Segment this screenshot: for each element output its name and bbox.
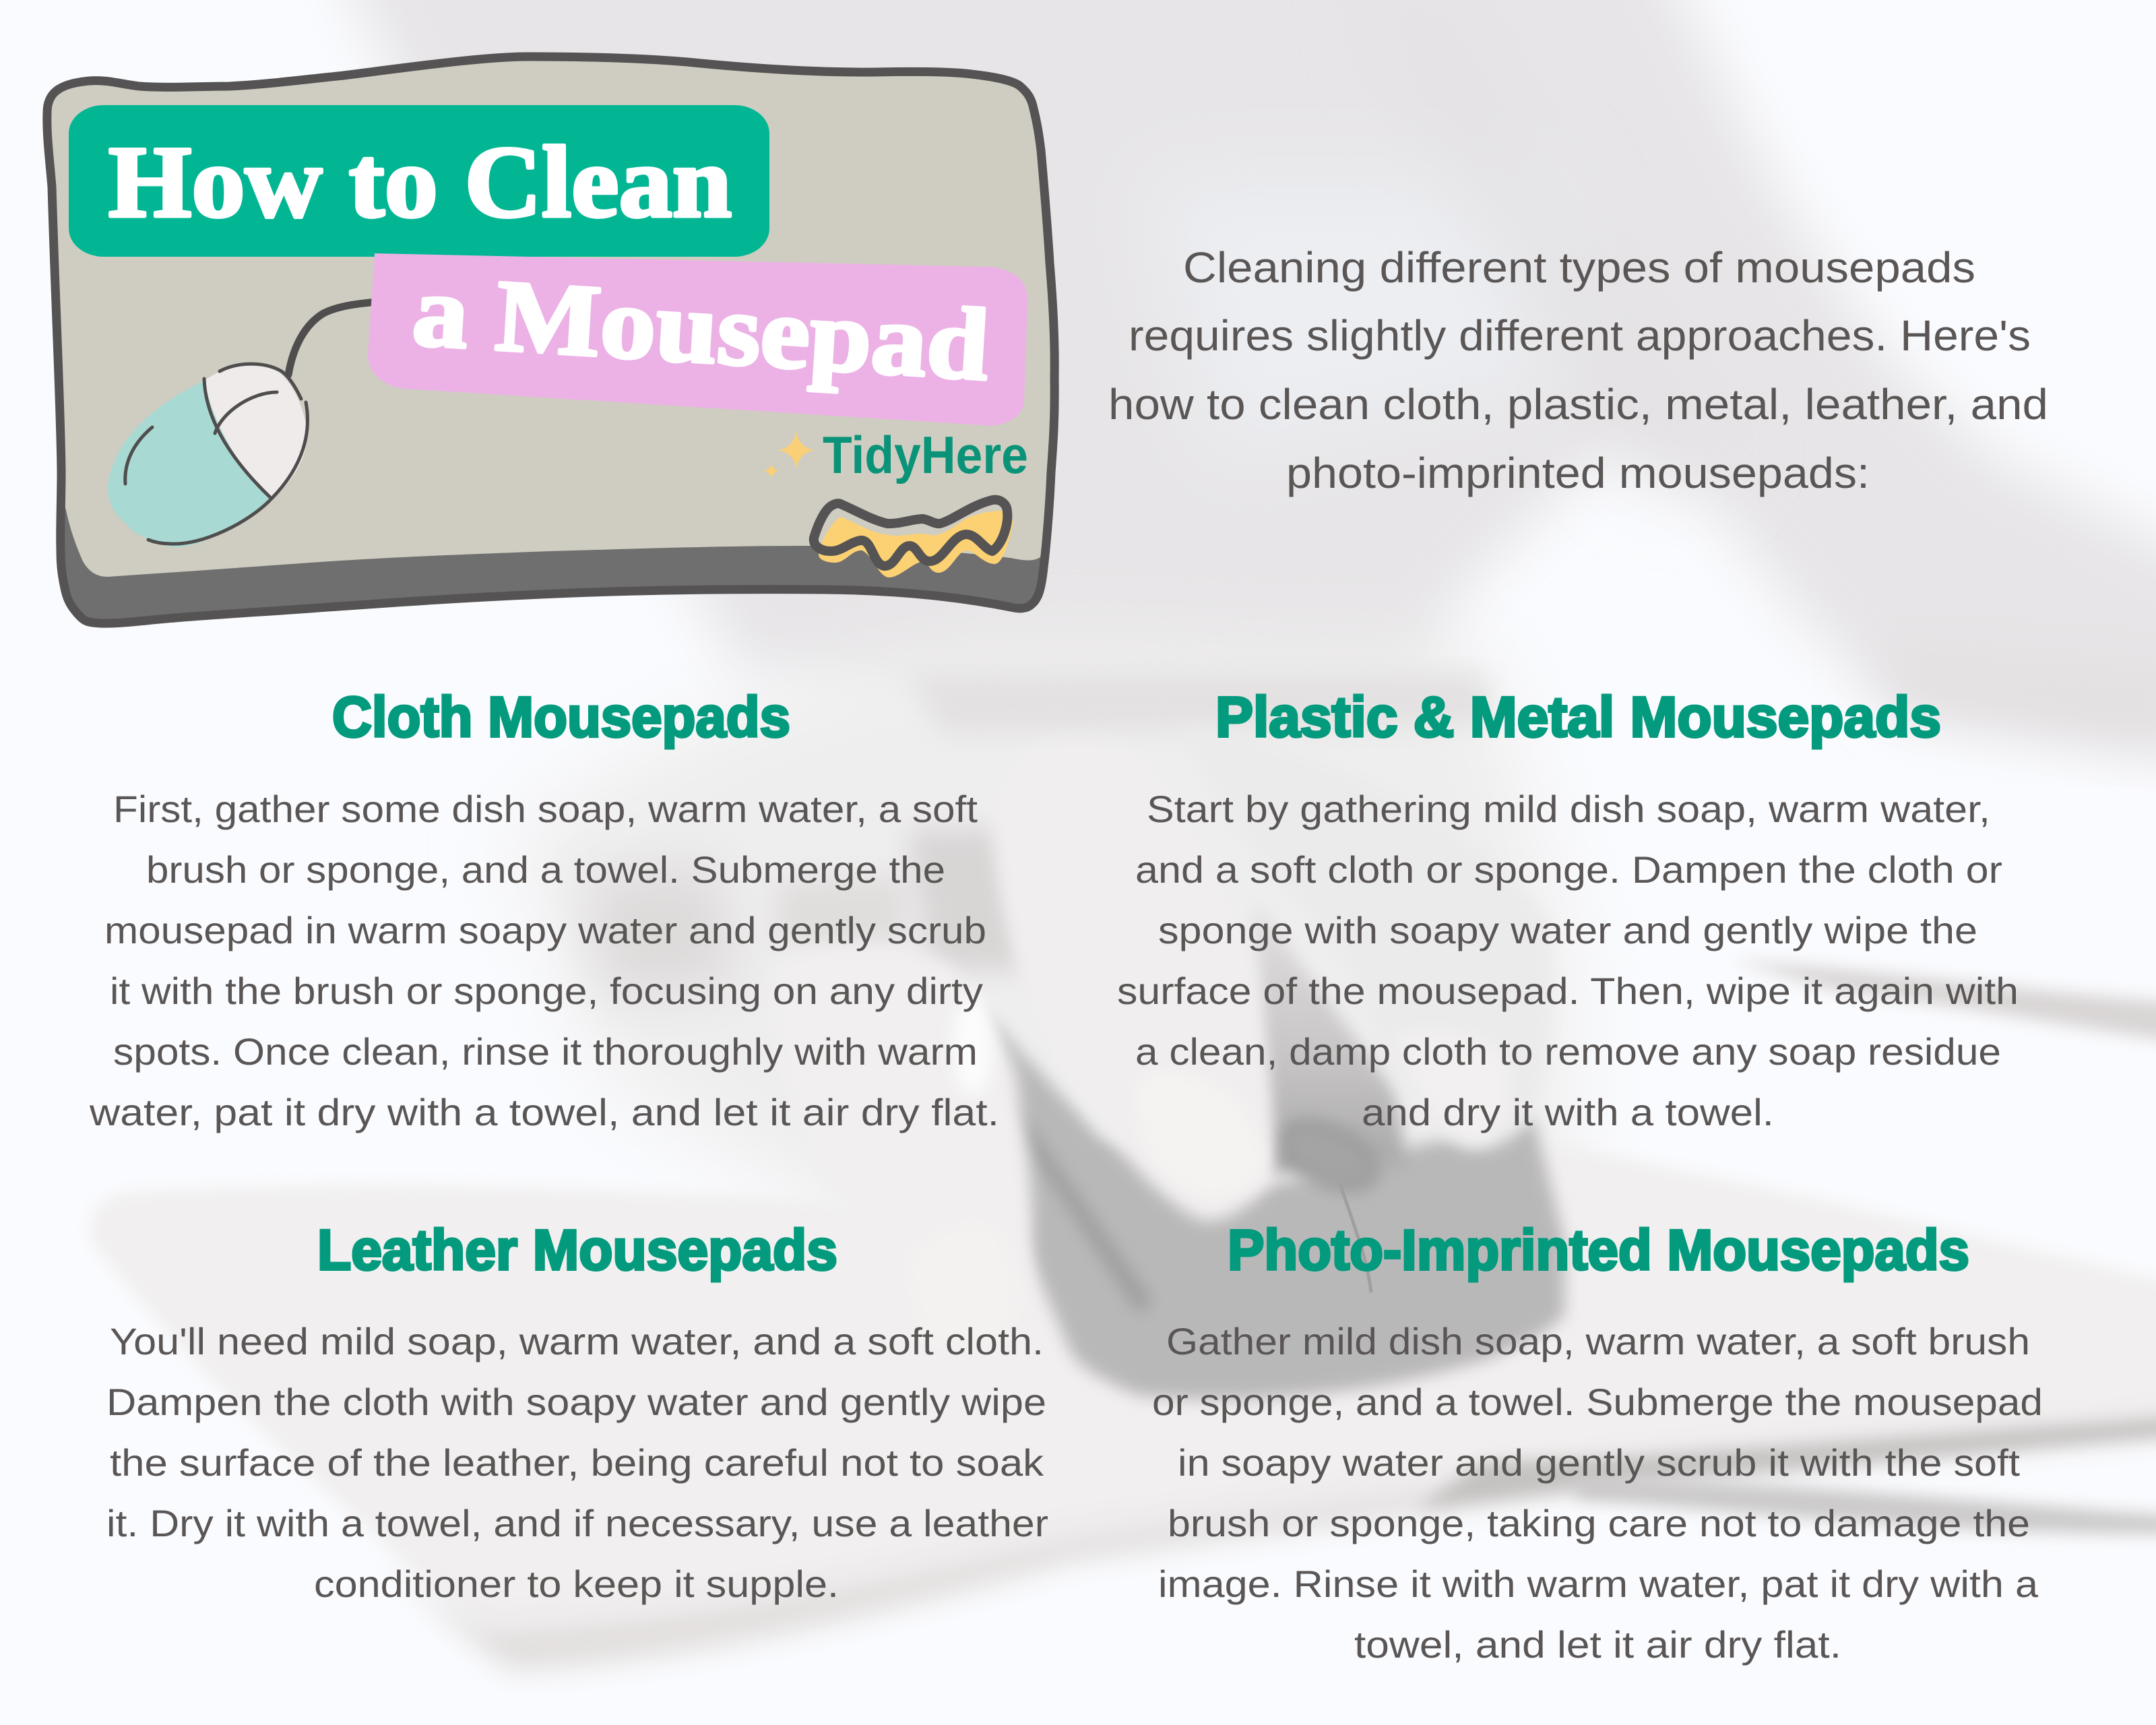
text block: leather instructions: conditioner to keep it supple.: [314, 1563, 839, 1605]
title pill: How to Clean: How to Clean: [108, 125, 732, 239]
text block: plastic and metal instructions: sponge with soapy water and gently wipe the: [1158, 909, 1977, 951]
arm: [323, 0, 2156, 755]
text block: leather instructions: [106, 1320, 1048, 1605]
text block: cloth instructions: [89, 788, 999, 1133]
left finger: [774, 948, 1032, 1351]
intro paragraph: how to clean cloth, plastic, metal, leather, and: [1108, 380, 2048, 429]
icon: mouse cable: [288, 302, 377, 375]
text block: plastic and metal instructions: Start by gathering mild dish soap, warm water,: [1147, 788, 1990, 830]
icon: cleaning cloth: [814, 500, 1013, 577]
index finger: [992, 741, 1273, 1221]
heading: plastic and metal mousepads: Plastic & Metal Mousepads: [1215, 685, 1941, 749]
heading: photo-imprinted mousepads: Photo-Imprinted Mousepads: [1228, 1218, 1969, 1282]
text block: plastic and metal instructions: and dry it with a towel.: [1362, 1091, 1774, 1133]
ring finger: [1178, 725, 1553, 1150]
text block: leather instructions: Dampen the cloth with soapy water and gently wipe: [106, 1381, 1046, 1423]
text block: cloth instructions: water, pat it dry with a towel, and let it air dry flat.: [89, 1091, 999, 1133]
intro paragraph: requires slightly different approaches. Here's: [1129, 311, 2031, 360]
mousepad outline: [47, 57, 1054, 623]
back of hand: [512, 633, 1570, 1280]
desk mat: [90, 1146, 2156, 1623]
text block: cloth instructions: spots. Once clean, rinse it thoroughly with warm: [113, 1030, 978, 1073]
mousepad surface: [27, 40, 1078, 577]
text block: cloth instructions: it with the brush or sponge, focusing on any dirty: [110, 970, 983, 1012]
title illustration: mousepad: [27, 40, 1078, 623]
text block: photo-imprinted instructions: towel, and let it air dry flat.: [1354, 1623, 1841, 1666]
heading: leather mousepads: Leather Mousepads: [317, 1218, 837, 1282]
text block: leather instructions: it. Dry it with a towel, and if necessary, use a leather: [106, 1502, 1048, 1544]
text block: cloth instructions: First, gather some dish soap, warm water, a soft: [113, 788, 978, 830]
title pill: a Mousepad: a Mousepad: [410, 253, 992, 402]
text block: photo-imprinted instructions: brush or sponge, taking care not to damage the: [1168, 1502, 2030, 1544]
intro paragraph: Cleaning different types of mousepads: [1183, 243, 1975, 292]
intro paragraph: [1108, 243, 2048, 497]
panel: leather mousepads: [106, 1218, 1048, 1605]
mousepad base: [47, 57, 1054, 623]
title pill: How to Clean: [69, 105, 769, 257]
icon: computer mouse: [108, 364, 307, 547]
text block: cloth instructions: brush or sponge, and a towel. Submerge the: [146, 848, 945, 891]
text block: plastic and metal instructions: surface of the mousepad. Then, wipe it again with: [1117, 970, 2019, 1012]
text block: plastic and metal instructions: a clean, damp cloth to remove any soap residue: [1135, 1030, 2001, 1073]
logo: TidyHere: TidyHere: [823, 425, 1028, 484]
intro paragraph: photo-imprinted mousepads:: [1286, 449, 1870, 497]
text block: leather instructions: You'll need mild soap, warm water, and a soft cloth.: [110, 1320, 1044, 1362]
heading: cloth mousepads: Cloth Mousepads: [332, 685, 790, 749]
panel: plastic and metal mousepads: [1117, 685, 2019, 1133]
panel: cloth mousepads: [89, 685, 999, 1133]
text block: photo-imprinted instructions: in soapy water and gently scrub it with the soft: [1178, 1441, 2020, 1484]
text block: plastic and metal instructions: [1117, 788, 2019, 1133]
icon: sparkles: [764, 431, 815, 478]
text block: photo-imprinted instructions: Gather mild dish soap, warm water, a soft brush: [1166, 1320, 2030, 1362]
pen streak: [1732, 960, 2156, 1044]
text block: leather instructions: the surface of the leather, being careful not to soak: [110, 1441, 1044, 1484]
title pill: a Mousepad: [368, 253, 1027, 426]
text block: cloth instructions: mousepad in warm soapy water and gently scrub: [104, 909, 986, 951]
scroll wheel and seam: [1271, 1110, 1386, 1201]
text block: photo-imprinted instructions: [1152, 1320, 2043, 1666]
panel: photo-imprinted mousepads: [1152, 1218, 2043, 1666]
text block: plastic and metal instructions: and a soft cloth or sponge. Dampen the cloth or: [1135, 848, 2002, 891]
text block: photo-imprinted instructions: image. Rinse it with warm water, pat it dry with a: [1158, 1563, 2039, 1605]
computer mouse body: [977, 1004, 1564, 1400]
text block: photo-imprinted instructions: or sponge, and a towel. Submerge the mousepad: [1152, 1381, 2043, 1423]
